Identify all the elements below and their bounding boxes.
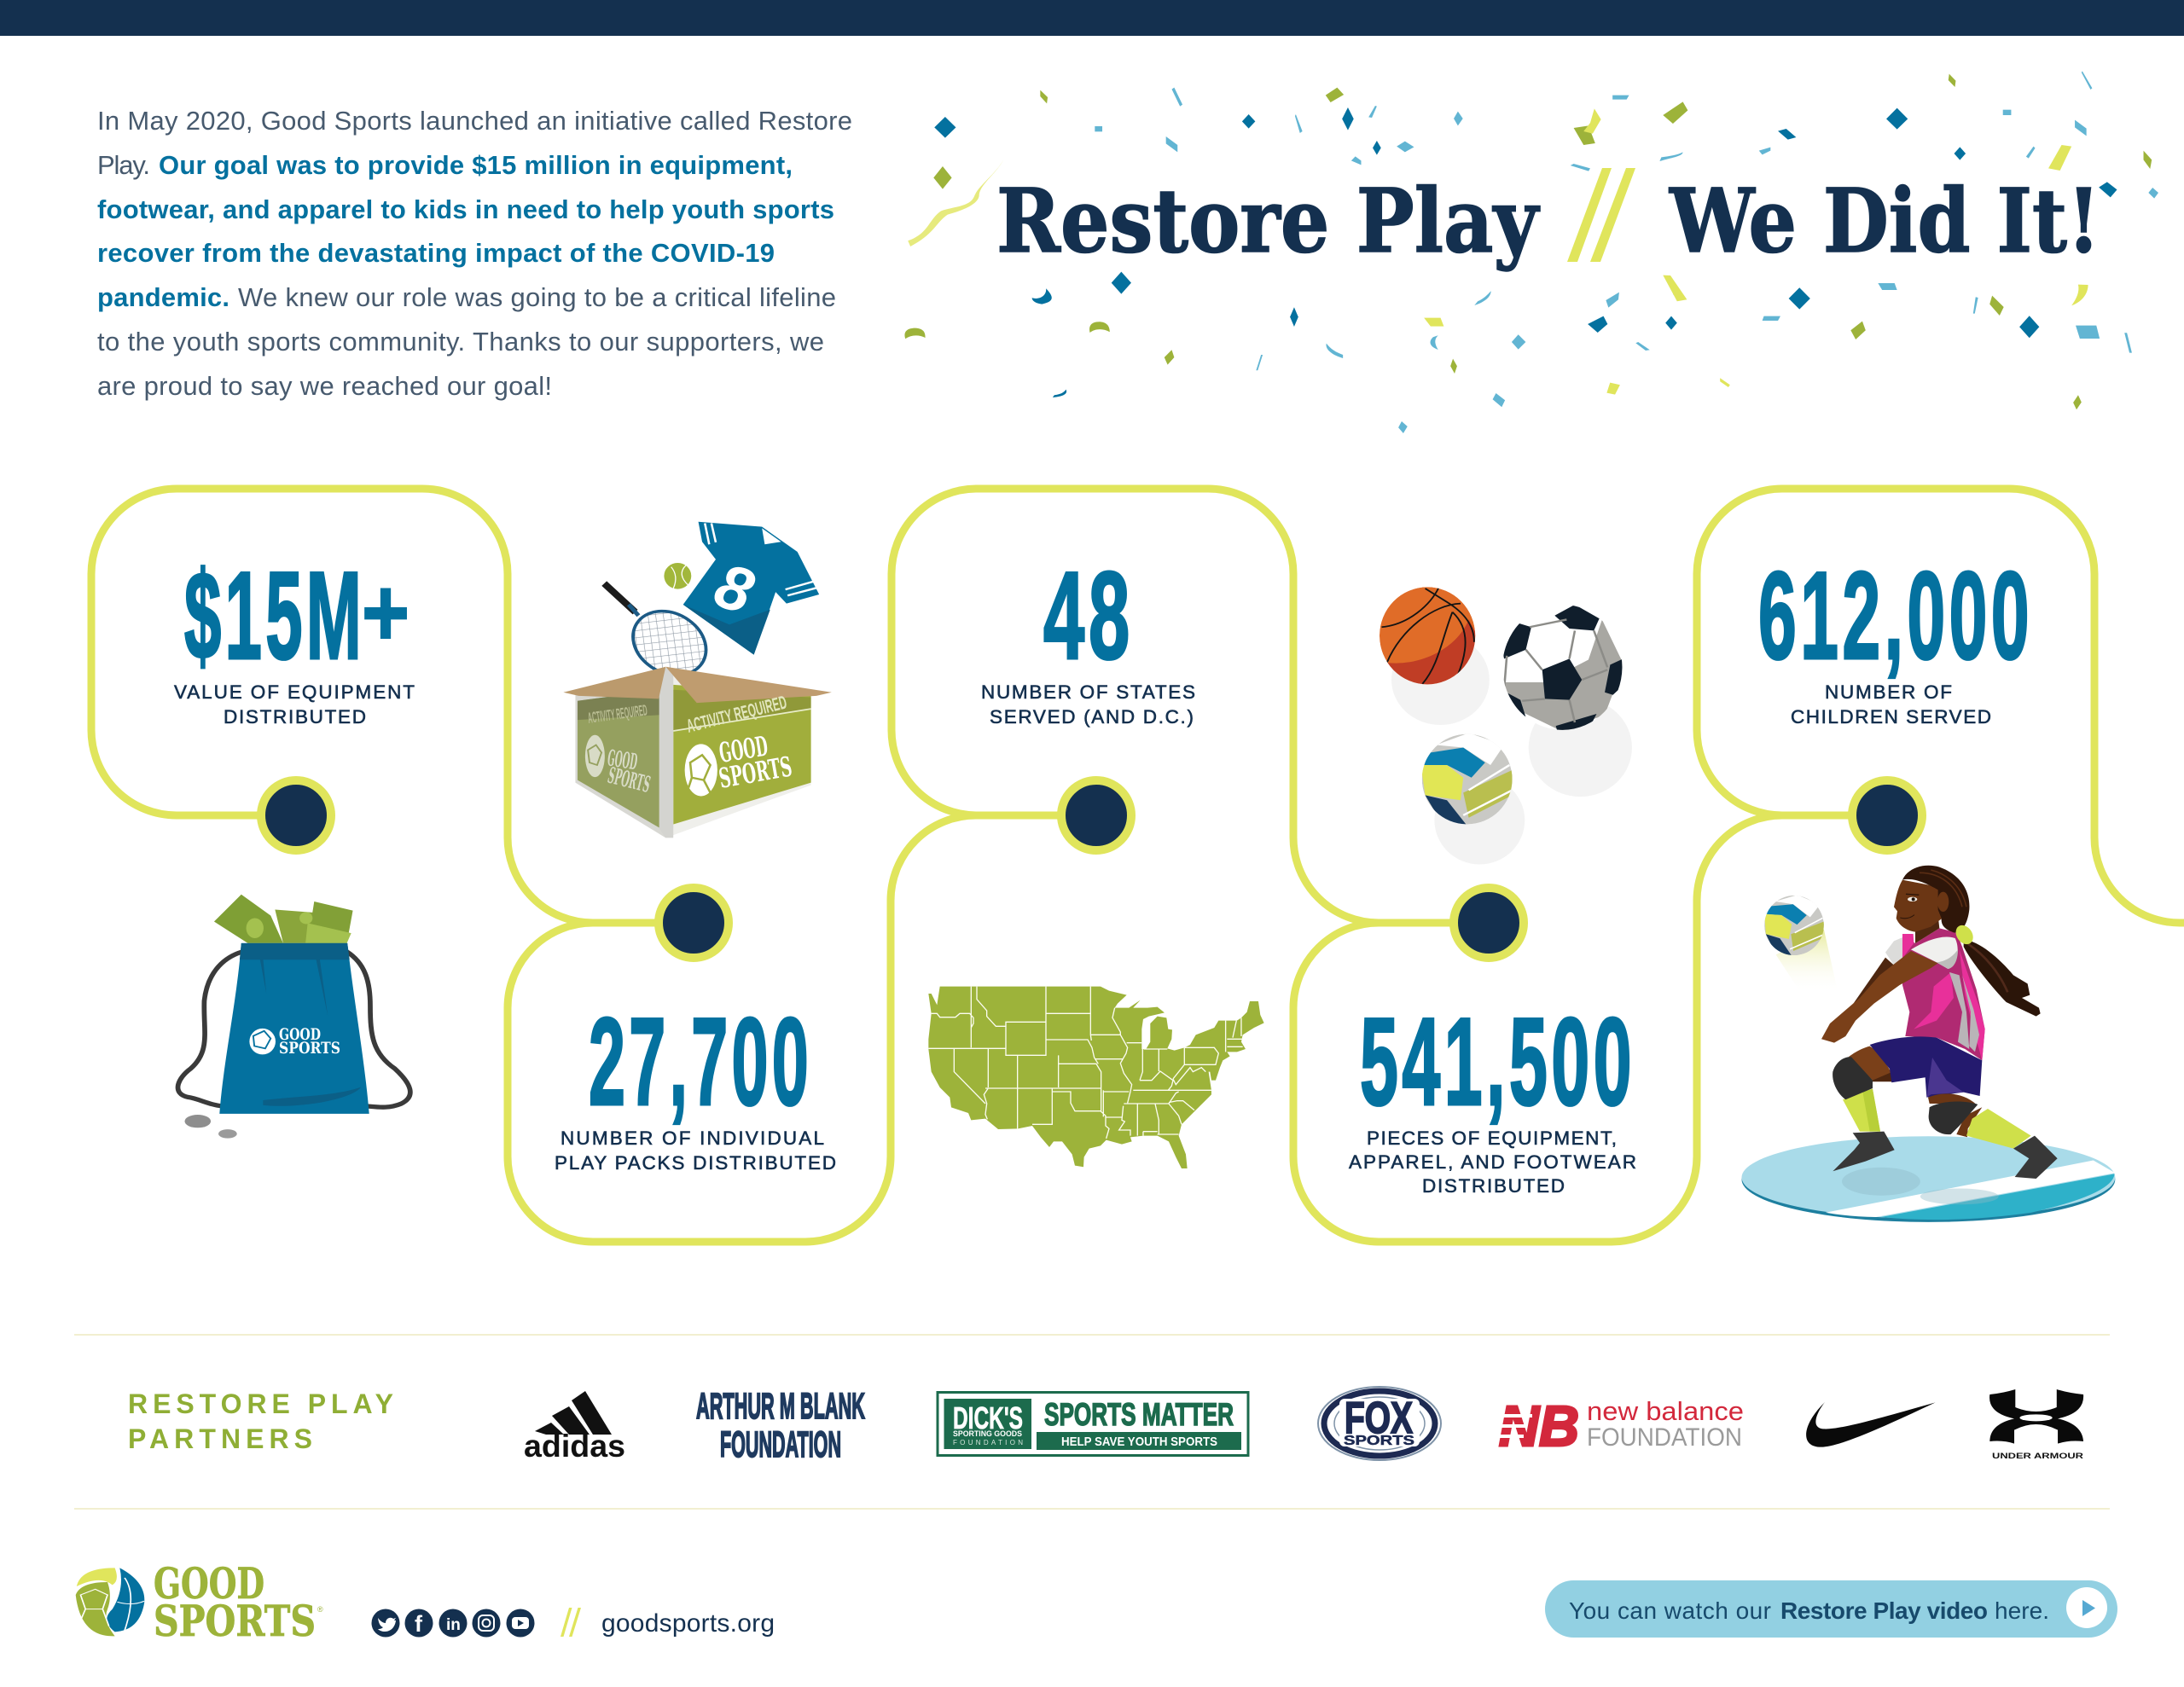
stat: states (981, 546, 1195, 728)
footer slashes (561, 1608, 581, 1637)
logo: Dick's Sporting Goods Foundation Sports Matter (938, 1392, 1248, 1455)
logo: Under Armour: UNDER ARMOUR (1992, 1452, 2083, 1461)
icon: gear box with racket, ball and jersey: ACTIVITY REQUIRED (587, 701, 648, 727)
logo: Good Sports (76, 1558, 323, 1646)
social icons (372, 1609, 534, 1638)
title: Restore Play (996, 170, 1541, 273)
logo: Dick's Sporting Goods Foundation Sports Matter: HELP SAVE YOUTH SPORTS (1061, 1435, 1217, 1449)
logo: Fox Sports (1318, 1387, 1441, 1460)
illustration: volleyball player (1821, 866, 2058, 1179)
partners heading: RESTORE PLAY (128, 1388, 393, 1419)
icon: gear box with racket, ball and jersey: SPORTS (605, 763, 653, 798)
stat: value of equipment (174, 546, 415, 728)
play icon (2066, 1587, 2107, 1628)
icon: money drawstring bag: SPORTS (279, 1039, 340, 1058)
basketball (1380, 587, 1477, 687)
logo: Fox Sports: SPORTS (1344, 1434, 1414, 1448)
icon: gear box with racket, ball and jersey: GOOD (717, 729, 770, 769)
neck and face (1915, 915, 1939, 943)
connector dots (261, 780, 1922, 958)
logo: Good Sports: SPORTS (154, 1596, 316, 1646)
logo: Under Armour (1989, 1389, 2083, 1461)
jersey number: 8 (706, 549, 763, 628)
shorts (1870, 1036, 1982, 1098)
icon: gear box with racket, ball and jersey: GOOD (606, 745, 639, 775)
icon: gear box with racket, ball and jersey: SPORTS (717, 751, 794, 795)
connector line linking the stat cards (91, 489, 2184, 1242)
logo: New Balance Foundation: FOUNDATION (1587, 1423, 1742, 1452)
logo: Good Sports: GOOD (154, 1558, 264, 1609)
logo: adidas: adidas (524, 1429, 625, 1464)
soccer ball (1501, 605, 1627, 735)
partners heading (128, 1388, 393, 1454)
thigh (1849, 1046, 1892, 1081)
ponytail (1964, 940, 2041, 1017)
logo: Good Sports: ® (317, 1605, 323, 1614)
far sleeve (1885, 936, 1904, 965)
far leg (1956, 1107, 1982, 1137)
icon: small volleyball in the air (1762, 893, 1826, 957)
video button: You can watch our (1569, 1597, 1771, 1624)
near sleeve (1911, 936, 1958, 969)
dividers (74, 1335, 2110, 1509)
title: We Did It! (1669, 170, 2100, 273)
video button: Restore Play video (1780, 1597, 1988, 1624)
confetti (904, 71, 2158, 433)
logo: Dick's Sporting Goods Foundation Sports Matter: SPORTS MATTER (1044, 1397, 1234, 1432)
icon: basketball, soccer ball and volleyball (1380, 587, 1632, 865)
stat: play packs: 27,700 (589, 992, 812, 1131)
stat: states: SERVED (AND D.C.) (990, 706, 1194, 728)
stat: children served (1758, 546, 2033, 728)
logo: Dick's Sporting Goods Foundation Sports Matter: SPORTING GOODS (953, 1429, 1022, 1439)
partners heading: PARTNERS (128, 1423, 312, 1454)
stat: play packs: PLAY PACKS DISTRIBUTED (555, 1152, 836, 1174)
stat: pieces of equipment (1349, 992, 1636, 1197)
stat: value of equipment: $15M (184, 546, 365, 685)
illustration: court disc (1742, 930, 2115, 1222)
logo: Dick's Sporting Goods Foundation Sports Matter: FOUNDATION (953, 1439, 1023, 1446)
intro paragraph: are proud to say we reached our goal! (97, 371, 552, 401)
intro paragraph: In May 2020, Good Sports launched an initiative called Restore (97, 106, 852, 136)
intro paragraph (97, 106, 852, 401)
map: United States (928, 987, 1264, 1168)
website: goodsports.org (601, 1609, 775, 1638)
far arm (1844, 958, 1894, 1019)
logo: Fox Sports: FOX (1345, 1394, 1413, 1443)
title (996, 168, 2100, 273)
stat: states: NUMBER OF STATES (981, 681, 1195, 703)
stat: pieces of equipment: PIECES OF EQUIPMENT, (1367, 1128, 1617, 1149)
intro paragraph: recover from the devastating impact of the COVID-19 (97, 238, 775, 268)
stat: pieces of equipment: 541,500 (1360, 992, 1635, 1131)
intro paragraph: Our goal was to provide $15 million in equipment, (159, 150, 793, 180)
stat: value of equipment: + (362, 559, 410, 666)
video button: here. (1995, 1597, 2049, 1624)
near arm (1821, 951, 1938, 1043)
stat: value of equipment: DISTRIBUTED (224, 706, 366, 728)
stat: children served: NUMBER OF (1825, 681, 1952, 703)
title slashes (1567, 168, 1635, 262)
stat: value of equipment: VALUE OF EQUIPMENT (174, 681, 415, 703)
volleyball (1420, 733, 1513, 824)
near leg (1843, 1089, 1880, 1132)
stat: children served: CHILDREN SERVED (1791, 706, 1991, 728)
stat: play packs (555, 992, 836, 1174)
intro paragraph: Play. (97, 150, 150, 180)
social icons: f (415, 1611, 423, 1637)
logo: Nike swoosh (1806, 1402, 1936, 1447)
video button (1545, 1580, 2117, 1638)
logo: Arthur M Blank Foundation (696, 1386, 865, 1465)
icon: gear box with racket, ball and jersey: ACTIVITY REQUIRED (684, 692, 789, 737)
icon: gear box with racket, ball and jersey (563, 522, 832, 838)
icon: money drawstring bag (178, 895, 410, 1139)
top navy bar (0, 0, 2184, 36)
stat: pieces of equipment: DISTRIBUTED (1422, 1175, 1565, 1197)
stat: states: 48 (1043, 546, 1134, 685)
intro paragraph: footwear, and apparel to kids in need to help youth sports (97, 194, 834, 224)
logo emblem (76, 1568, 144, 1636)
logo: Arthur M Blank Foundation: ARTHUR M BLANK (696, 1386, 865, 1427)
intro paragraph: to the youth sports community. Thanks to our supporters, we (97, 327, 824, 357)
shirt (1902, 928, 1985, 1060)
logo: Arthur M Blank Foundation: FOUNDATION (720, 1424, 841, 1465)
icon: money drawstring bag: GOOD (279, 1025, 321, 1044)
logo: New Balance Foundation: new balance (1587, 1396, 1744, 1426)
logo: Dick's Sporting Goods Foundation Sports Matter: DICK'S (953, 1400, 1023, 1435)
logo: New Balance Foundation: NB (1499, 1394, 1579, 1458)
intro paragraph: pandemic. (97, 282, 229, 312)
social icons: in (446, 1616, 461, 1634)
logo: adidas (524, 1391, 625, 1464)
logo: New Balance Foundation (1493, 1394, 1744, 1458)
stat: play packs: NUMBER OF INDIVIDUAL (561, 1128, 824, 1149)
intro paragraph: We knew our role was going to be a critical lifeline (238, 282, 836, 312)
stat: pieces of equipment: APPAREL, AND FOOTWEAR (1349, 1151, 1636, 1173)
